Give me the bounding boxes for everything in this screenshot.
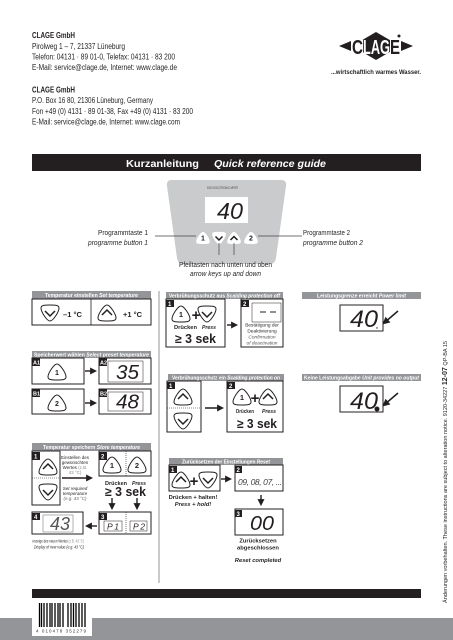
address block: German: Telefon: 04131 · 89 01-0, Telefax: 04131 · 83 200 (32, 52, 175, 62)
panel: scalding protection on: Verbrühungsschutz ein Scalding protection on (172, 376, 281, 382)
step 1: + (192, 307, 201, 324)
new value note (32, 538, 84, 550)
address block: English (32, 86, 193, 126)
press and hold: Press + hold! (175, 502, 211, 508)
step B1: B1 (33, 392, 40, 398)
step 1: 1 (179, 310, 183, 319)
instruction German: Einstellen des (61, 455, 90, 460)
panel: no output (302, 374, 421, 415)
panel: set temperature (32, 291, 151, 325)
step 1: ≥ 3 sek (175, 332, 216, 346)
label: arrow keys: Pfeiltasten nach unten und oben (179, 262, 272, 269)
label: arrow keys (179, 262, 272, 278)
panel: set temperature: Temperatur einstellen Set temperature (45, 293, 138, 299)
plus one degree: +1 °C (123, 310, 143, 319)
panel: store temperature: Temperatur speichern Store temperature (43, 445, 140, 451)
step A2 (99, 358, 151, 384)
panel display: 40 (217, 198, 243, 224)
instruction English: temperature (63, 491, 88, 496)
panel: select preset temperature (32, 351, 151, 414)
panel buttons (196, 232, 258, 244)
step A1 (32, 358, 84, 384)
address block: English: E-Mail: service@clage.de, Internet: www.clage.com (32, 118, 180, 126)
barcode (32, 600, 92, 636)
step 3: 3 (101, 515, 105, 521)
panel: store temperature (32, 443, 151, 550)
step 2: Deaktivierung (247, 328, 277, 334)
step 1: 1 (169, 384, 173, 390)
step 3: 00 (250, 513, 274, 535)
step B2 (99, 389, 151, 414)
label: programme button 2: programme button 2 (302, 240, 363, 247)
CLAGE logo (339, 32, 413, 60)
panel: reset (169, 458, 283, 564)
display: 40 (350, 388, 379, 415)
step 4 (32, 512, 83, 534)
leader lines (155, 236, 302, 255)
arrow down (260, 495, 262, 504)
step 3 (99, 512, 151, 534)
step 3 (235, 509, 283, 535)
step 2 (227, 381, 283, 432)
step 2: of deactivation (247, 340, 278, 346)
footer black bar (32, 589, 421, 598)
CLAGE logo: LAG (363, 37, 390, 59)
step 2: 2 (101, 454, 105, 460)
press and hold: Drücken + halten! (169, 495, 217, 501)
arrow (221, 478, 230, 480)
press and hold (169, 495, 217, 508)
address block: German: CLAGE GmbH (32, 31, 75, 40)
barcode: 4 010478 352279 (36, 628, 86, 634)
icon: down button (41, 305, 59, 321)
instruction German: 43 °C) (69, 470, 82, 475)
panel: power limit: Leistungsgrenze erreicht Power limit (317, 294, 406, 300)
step 2: 1 (110, 461, 114, 470)
step 2: Bestätigung der (245, 322, 279, 328)
label: programme button 1 (87, 230, 148, 247)
step 3: 3 (236, 512, 240, 518)
step 2: 2 (243, 302, 247, 308)
step A1: 1 (55, 370, 59, 377)
panel buttons: 1 (201, 236, 205, 242)
step 2: Confirmation (248, 334, 276, 340)
step 2: 2 (135, 461, 139, 470)
press label: Press (132, 481, 147, 487)
new value note: Anzeige des neuen Wertes (z.B. 43 °C) (32, 538, 84, 544)
step B2: B2 (100, 392, 107, 398)
step 3: P1 (107, 522, 119, 532)
panel buttons: 2 (249, 236, 253, 242)
step B2: 48 (116, 392, 139, 414)
step 2: ≥ 3 sek (237, 417, 277, 431)
new value note: Display of new value (e.g. 43 °C) (34, 544, 84, 550)
press label: Drücken (105, 481, 127, 487)
minus one degree: –1 °C (63, 310, 83, 319)
step 2: 2 (229, 384, 233, 390)
arrows down (112, 498, 137, 508)
step A2: A2 (100, 360, 107, 366)
label: programme button 1: Programmtaste 1 (98, 230, 148, 237)
panel: scalding protection off (166, 292, 283, 347)
address block: German (32, 31, 177, 72)
label: arrow keys: arrow keys up and down (190, 271, 261, 278)
step 2: 1 (240, 393, 244, 402)
step 3: P2 (133, 522, 145, 532)
arrow (227, 324, 236, 326)
address block: English: CLAGE GmbH (32, 86, 75, 94)
panel: scalding protection on (167, 374, 284, 432)
arrow to indicator (384, 311, 398, 323)
label: programme button 2: Programmtaste 2 (303, 230, 350, 237)
title bar: Kurzanleitung (126, 159, 199, 170)
step 2: Press (262, 409, 276, 415)
device control panel (167, 180, 286, 264)
panel: no output: Keine Leistungsabgabe Unit provides no output (304, 376, 419, 382)
address block: German: Pirolweg 1 – 7, 21337 Lüneburg (32, 42, 125, 51)
instruction German (61, 455, 90, 475)
reset completed text (235, 538, 282, 564)
step 4: 43 (50, 514, 70, 534)
panel: scalding protection off: Verbrühungsschutz aus Scalding protection off (169, 294, 281, 300)
display: 40 (350, 306, 379, 333)
step 2: 09, 08, 07, ... (238, 477, 282, 487)
reset completed text: Zurücksetzen (239, 538, 277, 544)
step A2: 35 (116, 362, 140, 384)
arrow to step 2 (62, 477, 91, 479)
step 2 (235, 465, 283, 491)
device control panel: DSO ELECTRONIC MPS® (207, 186, 238, 190)
vertical divider (158, 291, 160, 583)
CLAGE logo: E (390, 37, 400, 59)
instruction German: Wertes (z.B. (63, 465, 87, 470)
step 1: + (190, 473, 199, 490)
icon: up button (98, 305, 116, 321)
arrow to step 4 (87, 525, 97, 527)
step B1 (32, 389, 84, 414)
step 1: 1 (171, 468, 175, 474)
step 1: Drücken (174, 325, 197, 331)
panel: reset: Zurücksetzen der Einstellungen Reset (182, 460, 270, 466)
step 2: Drücken (236, 409, 255, 415)
press label (105, 481, 147, 487)
logo tagline: ...wirtschaftlich warmes Wasser. (331, 70, 421, 76)
step 2: + (251, 390, 260, 407)
step B1: 2 (55, 401, 59, 408)
step 4: 4 (34, 515, 38, 521)
reset completed text: Reset completed (235, 558, 282, 564)
address block: English: Fon +49 (0) 4131 · 89 01-38, Fax +49 (0) 4131 · 83 200 (32, 107, 193, 116)
panel: power limit (302, 292, 421, 333)
step 1 (166, 299, 225, 347)
arrow (205, 407, 222, 409)
side note rotated: Änderungen vorbehalten. These instructions are subject to alteration notice. 9120-34227 12-07 QP-BA 15 (442, 341, 449, 603)
step 2 (241, 299, 283, 347)
arrow B (85, 402, 95, 404)
address block: English: P.O. Box 16 80, 21306 Lüneburg, Germany (32, 96, 153, 105)
step 2: 2 (236, 468, 240, 474)
step 1: Press (202, 325, 217, 331)
title bar (32, 154, 421, 171)
instruction English: Set required (63, 486, 88, 491)
instruction English: (e.g. 43 °C) (63, 496, 87, 501)
instruction German: gewünschten (62, 460, 89, 465)
label: programme button 2 (302, 230, 363, 247)
arrow A (85, 370, 95, 372)
arrow to indicator (384, 393, 398, 405)
step 1: 1 (168, 302, 172, 308)
step A1: A1 (33, 360, 40, 366)
title bar: Quick reference guide (214, 159, 326, 170)
step 2 (99, 451, 151, 476)
label: programme button 1: programme button 1 (87, 240, 148, 247)
three seconds: ≥ 3 sek (105, 485, 146, 499)
reset completed text: abgeschlossen (237, 546, 279, 552)
step 1: 1 (34, 454, 38, 460)
panel: select preset temperature: Speicherwert wählen Select preset temperature (34, 352, 149, 358)
footer grey band (0, 618, 453, 640)
step 1 (169, 465, 220, 491)
CLAGE logo: C (352, 37, 363, 59)
instruction English (63, 486, 88, 501)
address block: German: E-Mail: service@clage.de, Internet: www.clage.de (32, 63, 177, 72)
